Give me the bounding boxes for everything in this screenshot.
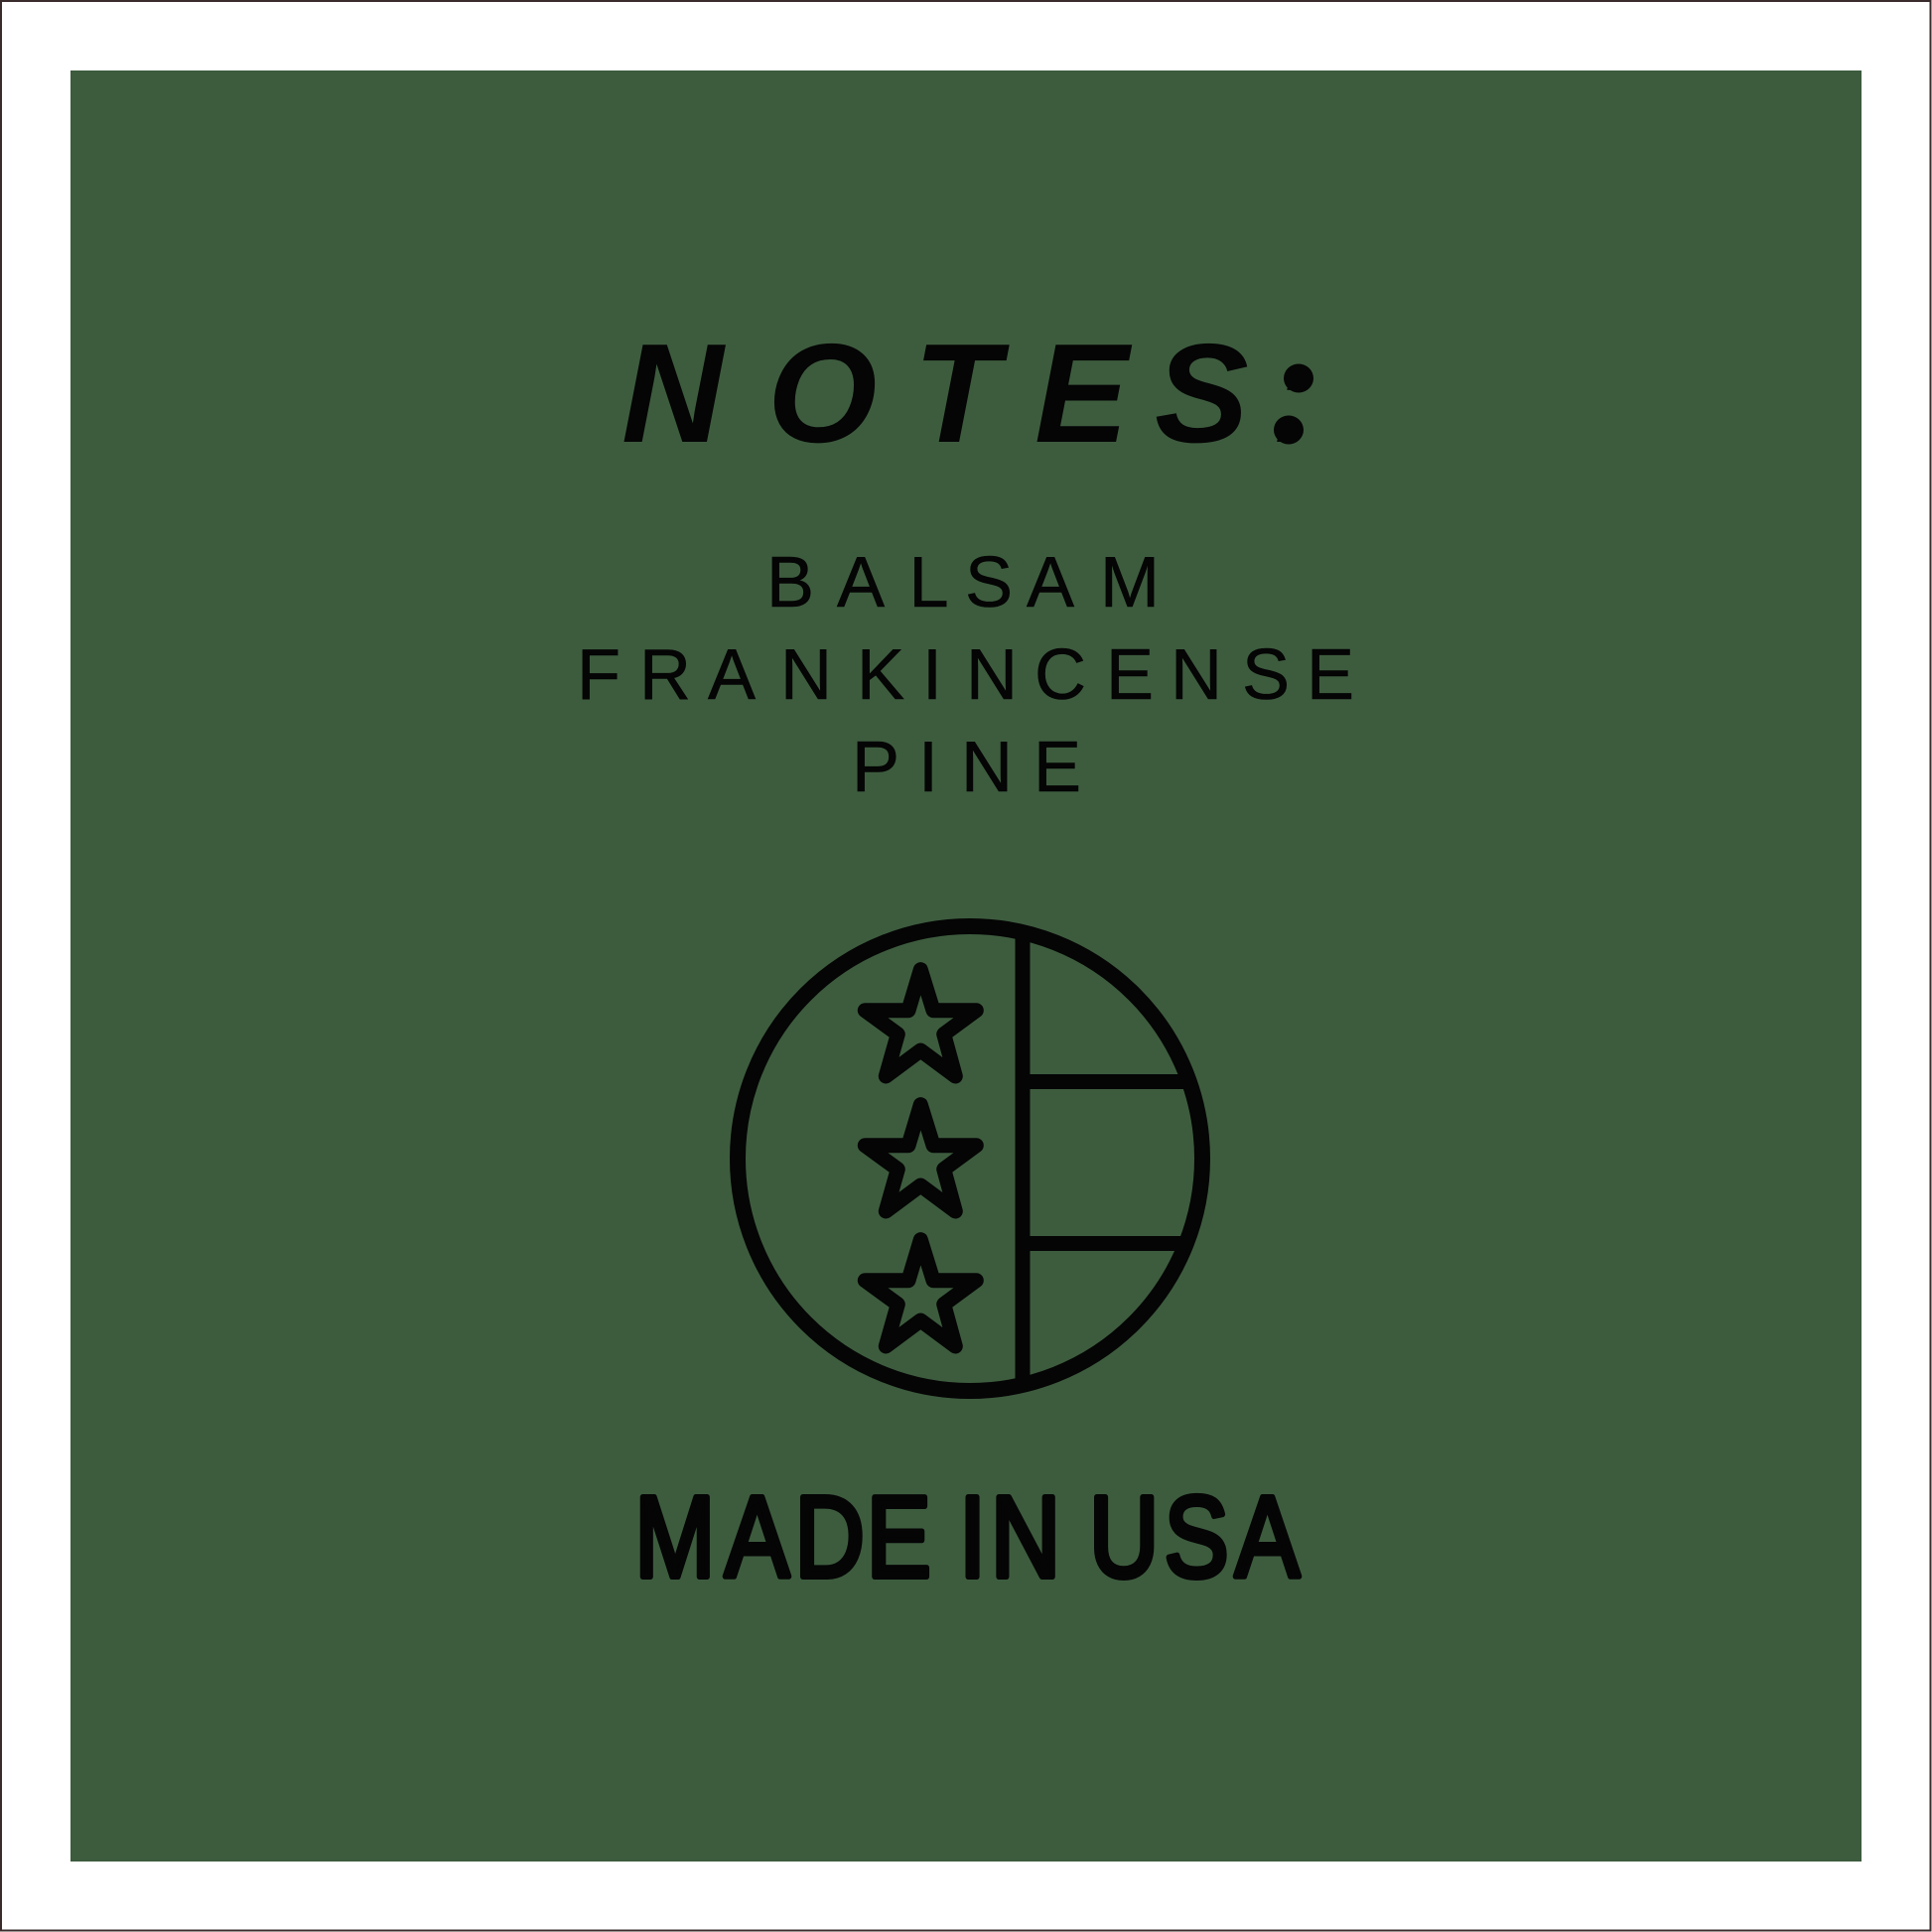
- icon: round flag with three stars: [738, 926, 1202, 1391]
- note: frankincense: FRANKINCENSE: [577, 635, 1354, 715]
- note: balsam: BALSAM: [766, 543, 1160, 622]
- star: bottom: [865, 1240, 976, 1346]
- flag upper horizontal bar: [1023, 1074, 1189, 1089]
- heading: notes: NOTES:: [621, 315, 1317, 473]
- label: made in usa: MADE IN USA: [634, 1472, 1301, 1601]
- star: top: [865, 970, 976, 1076]
- list of scent notes: [577, 543, 1354, 807]
- three stars: [865, 970, 976, 1346]
- flag circle outline: [738, 926, 1202, 1391]
- star: middle: [865, 1105, 976, 1211]
- note: pine: PINE: [852, 728, 1081, 807]
- flag lower horizontal bar: [1023, 1236, 1189, 1251]
- flag vertical bar: [1015, 931, 1031, 1386]
